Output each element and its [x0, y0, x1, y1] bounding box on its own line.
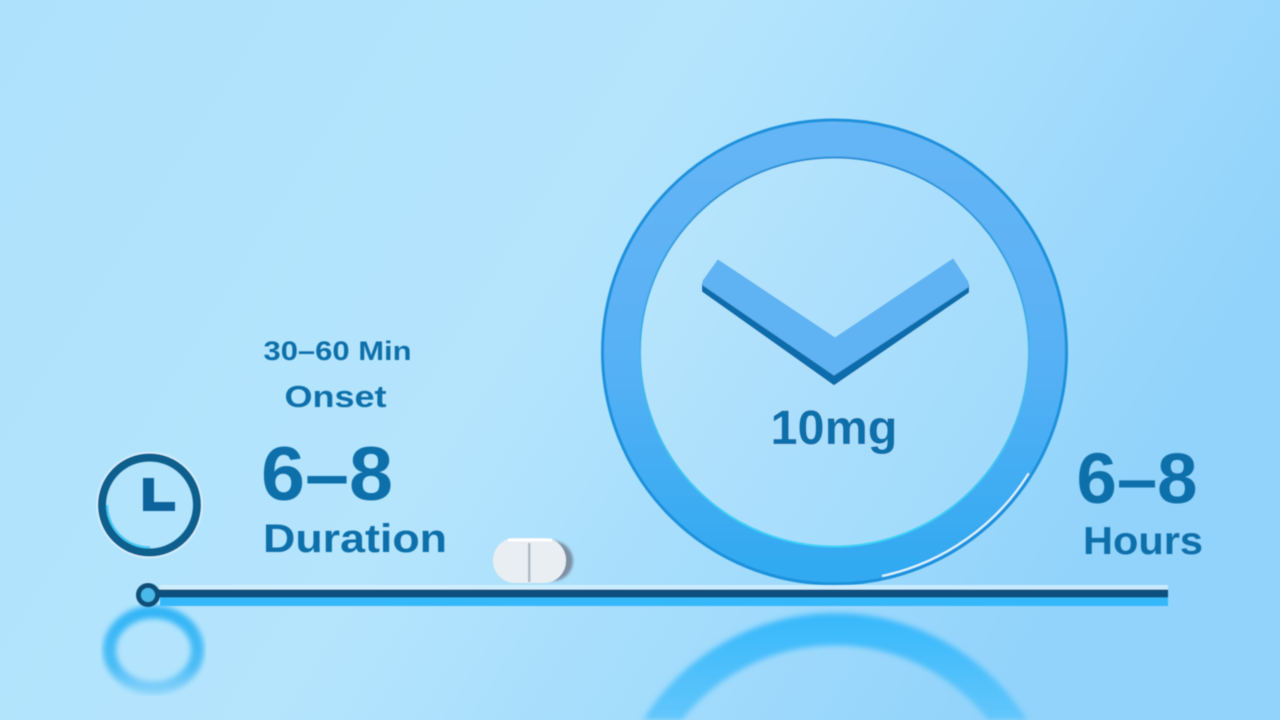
- clock ring: [602, 120, 1066, 584]
- duration value: 6–8: [261, 432, 393, 517]
- small ring reflection: [110, 612, 198, 688]
- onset label: Onset: [284, 379, 386, 414]
- clock hands: [703, 259, 968, 384]
- onset range: 30–60 Min: [264, 336, 412, 366]
- large clock: [602, 120, 1066, 584]
- timeline start node: [138, 586, 158, 604]
- hours value: 6–8: [1076, 440, 1198, 519]
- dose label: 10mg: [770, 402, 898, 455]
- pill: [493, 538, 573, 583]
- hours label: Hours: [1083, 520, 1203, 563]
- timeline axis: [138, 585, 1168, 606]
- small clock icon: [97, 452, 202, 558]
- large clock reflection: [643, 613, 1027, 720]
- clock face: [640, 158, 1028, 546]
- duration label: Duration: [263, 517, 447, 561]
